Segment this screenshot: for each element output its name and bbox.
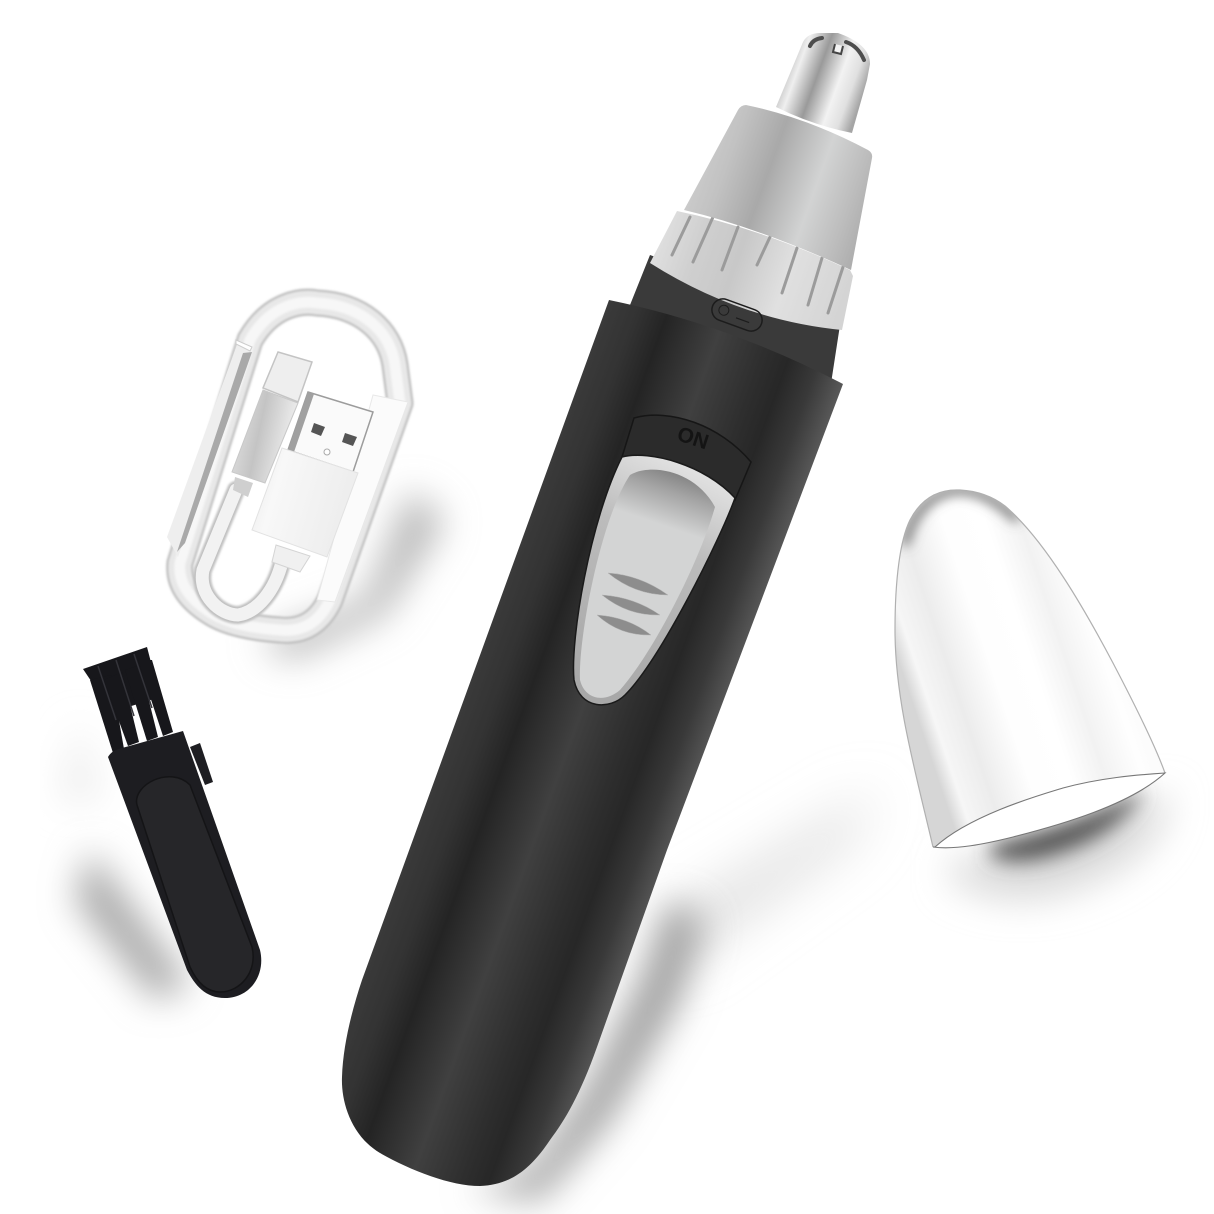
clear protective cap	[895, 490, 1165, 848]
cap shell	[895, 490, 1165, 848]
slide switch	[573, 455, 735, 705]
USB contact holes	[311, 423, 357, 446]
grip ridges	[597, 573, 668, 635]
inner cable loop	[202, 490, 282, 615]
lightning connector housing	[232, 390, 298, 483]
shadow: cap	[950, 790, 1170, 900]
shadow: trimmer	[470, 790, 880, 1200]
lightning strain relief	[233, 477, 253, 497]
USB metal shell	[288, 392, 373, 472]
dark collar	[630, 255, 840, 390]
on/off switch panel	[622, 415, 751, 500]
ring ticks	[672, 217, 843, 313]
outer cable loop	[180, 302, 400, 630]
handle recess	[137, 777, 253, 992]
trimmer	[342, 33, 872, 1186]
nozzle blades	[810, 38, 864, 60]
clear tie band, left	[167, 340, 252, 557]
adjustment ring	[650, 211, 853, 330]
handle	[108, 731, 261, 998]
cap top shading	[905, 490, 1018, 545]
switch inner face	[580, 470, 715, 698]
USB strain relief	[272, 545, 310, 572]
cap outline	[895, 490, 1165, 847]
USB cable	[167, 302, 408, 630]
cleaning brush	[83, 647, 261, 998]
bristles	[83, 647, 173, 753]
trimmer body	[342, 300, 843, 1186]
stainless nozzle	[776, 33, 870, 133]
silver cone	[684, 105, 872, 270]
clear tie band, right	[317, 395, 408, 602]
shadow: cable	[260, 490, 445, 660]
side tab	[190, 743, 213, 785]
USB plug housing	[252, 448, 358, 557]
shadow: brush	[60, 720, 190, 1000]
ON label: ON	[674, 423, 711, 454]
cap rim opening	[933, 773, 1165, 848]
lock indicator capsule	[709, 296, 765, 334]
lightning connector tip	[263, 352, 312, 402]
